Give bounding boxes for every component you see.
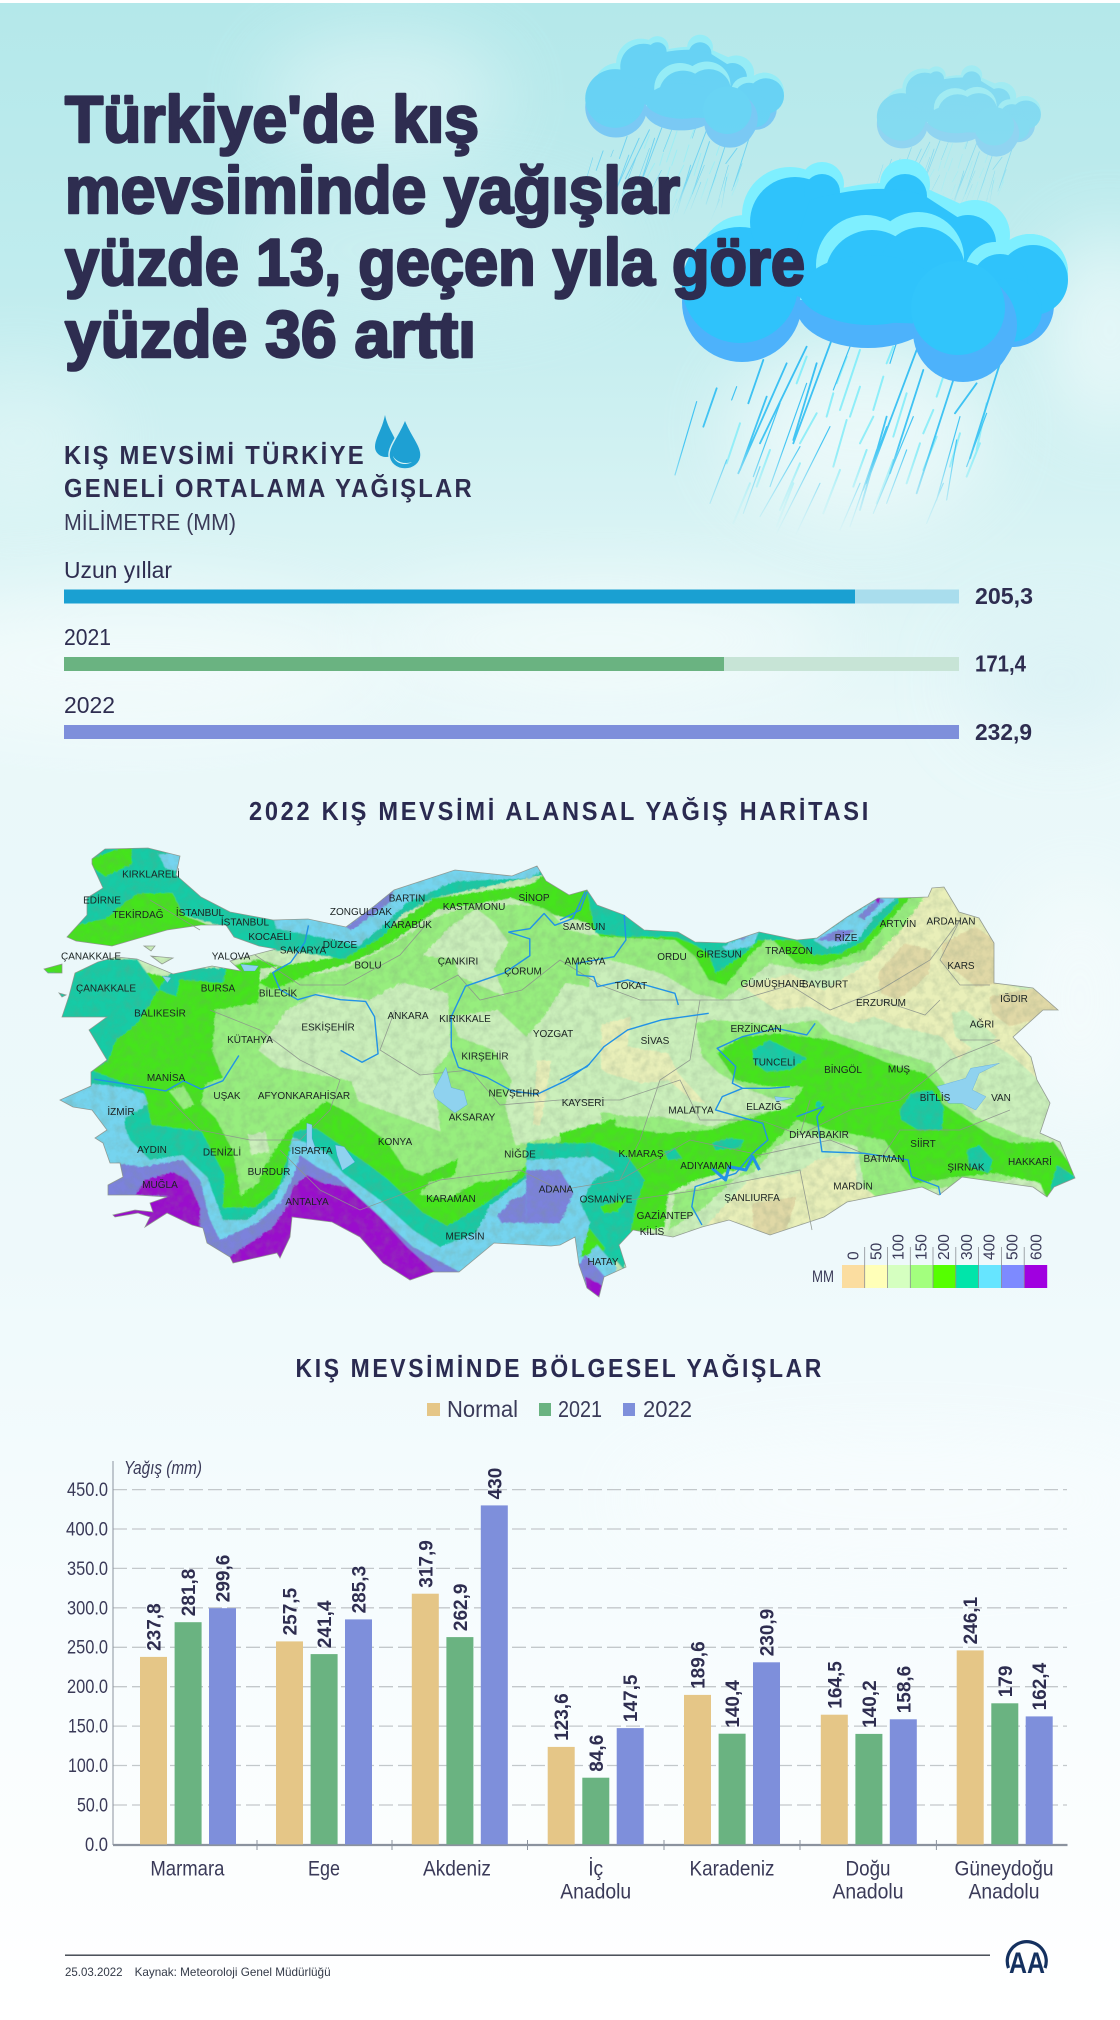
lime patch thrace bbox=[92, 848, 133, 878]
chart legend: 2021 bbox=[558, 1396, 602, 1422]
group: Güneydoğu Anadolu: Anadolu bbox=[968, 1881, 1040, 1904]
group: Doğu Anadolu: Anadolu bbox=[832, 1881, 904, 1904]
province labels bbox=[61, 868, 1052, 1268]
footer source line: 25.03.2022 bbox=[65, 1965, 123, 1979]
heading: regional rainfall: KIŞ MEVSİMİNDE BÖLGESEL YAĞIŞLAR bbox=[296, 1353, 824, 1383]
province labels: KAYSERİ bbox=[562, 1096, 604, 1109]
province labels: YALOVA bbox=[212, 952, 251, 962]
purple zones east bbox=[585, 897, 881, 1300]
light green zones east bbox=[560, 897, 1060, 1230]
province labels: BAYBURT bbox=[802, 980, 848, 991]
group: Akdeniz: 317,9 bbox=[416, 1540, 437, 1588]
group: Karadeniz: Karadeniz bbox=[690, 1858, 774, 1881]
province labels: BİTLİS bbox=[920, 1091, 951, 1104]
province labels: SİNOP bbox=[518, 891, 550, 904]
group: Marmara: 299,6 bbox=[214, 1555, 234, 1602]
province labels: KARAMAN bbox=[426, 1194, 476, 1205]
rivers bbox=[94, 892, 940, 1225]
y axis labels: 350.0 bbox=[67, 1558, 108, 1580]
province labels: TOKAT bbox=[615, 981, 647, 992]
group: Marmara: 237,8 bbox=[144, 1603, 166, 1651]
province labels: ÇANAKKALE bbox=[61, 952, 121, 962]
group: Akdeniz: 430 bbox=[485, 1468, 506, 1499]
province labels: K.MARAŞ bbox=[618, 1149, 664, 1160]
province labels: İSTANBUL bbox=[221, 916, 270, 928]
map legend bbox=[812, 1234, 1047, 1288]
heading: national average rainfall: KIŞ MEVSİMİ TÜRKİYE bbox=[64, 440, 366, 470]
chart legend bbox=[427, 1396, 692, 1422]
province labels: KASTAMONU bbox=[443, 902, 505, 913]
group: Güneydoğu Anadolu: 162,4 bbox=[1030, 1662, 1051, 1710]
province labels: BURSA bbox=[201, 984, 236, 994]
group: Akdeniz bbox=[412, 1468, 508, 1881]
group: Doğu Anadolu: Doğu bbox=[846, 1858, 890, 1881]
group: Ege: 257,5 bbox=[280, 1587, 302, 1635]
group: Marmara bbox=[140, 1555, 236, 1881]
province labels: AĞRI bbox=[970, 1018, 994, 1030]
bar: 2021 bbox=[64, 624, 1026, 676]
map legend: 100 bbox=[890, 1234, 908, 1260]
province labels: ISPARTA bbox=[291, 1146, 333, 1157]
province labels: SİİRT bbox=[910, 1137, 936, 1150]
periwinkle zone south bbox=[108, 1155, 460, 1272]
group: İç Anadolu: İç bbox=[588, 1858, 603, 1881]
province labels: DENİZLİ bbox=[203, 1146, 241, 1159]
title bbox=[65, 82, 805, 371]
yellow zones bbox=[600, 888, 1036, 1230]
heading: national average rainfall bbox=[64, 440, 474, 535]
group: Karadeniz bbox=[684, 1609, 780, 1881]
bar: 2022: 232,9 bbox=[975, 719, 1032, 745]
group: Güneydoğu Anadolu bbox=[954, 1596, 1054, 1904]
province labels: MARDİN bbox=[833, 1180, 873, 1192]
pale patches bbox=[248, 908, 601, 1155]
province labels: ERZURUM bbox=[856, 998, 906, 1009]
province labels: RİZE bbox=[835, 931, 858, 944]
province labels: OSMANİYE bbox=[580, 1192, 633, 1206]
group: İç Anadolu: 147,5 bbox=[621, 1674, 642, 1722]
province labels: KARS bbox=[947, 961, 975, 972]
province labels: ANTALYA bbox=[285, 1197, 329, 1208]
chart legend: 2022 bbox=[643, 1396, 692, 1422]
province labels: IĞDIR bbox=[1000, 992, 1028, 1005]
teal zones east bbox=[526, 873, 1077, 1270]
footer source line: Kaynak: Meteoroloji Genel Müdürlüğü bbox=[135, 1965, 331, 1979]
bar: Uzun yıllar bbox=[64, 557, 1033, 609]
lime zones west bbox=[44, 876, 617, 1228]
province labels: ÇORUM bbox=[504, 966, 542, 978]
group: Doğu Anadolu: 158,6 bbox=[894, 1666, 915, 1713]
title: yüzde 13, geçen yıla göre bbox=[65, 225, 805, 299]
map legend: MM bbox=[812, 1267, 834, 1286]
province labels: ADIYAMAN bbox=[680, 1161, 732, 1172]
group: Doğu Anadolu bbox=[821, 1661, 917, 1904]
group: Güneydoğu Anadolu: 179 bbox=[996, 1666, 1017, 1697]
map legend: 150 bbox=[914, 1234, 930, 1260]
small rain cloud left bbox=[582, 35, 784, 228]
province labels: UŞAK bbox=[213, 1091, 241, 1102]
group: Akdeniz: 262,9 bbox=[451, 1584, 472, 1631]
province labels: GİRESUN bbox=[696, 948, 742, 960]
province labels: KIRIKKALE bbox=[439, 1014, 491, 1025]
small rain cloud right bbox=[874, 65, 1041, 221]
province labels: ARTVİN bbox=[880, 917, 916, 930]
province labels: GAZİANTEP bbox=[637, 1209, 694, 1222]
province labels: AKSARAY bbox=[449, 1112, 496, 1124]
province labels: TRABZON bbox=[765, 946, 813, 957]
group: Ege: 241,4 bbox=[315, 1600, 336, 1648]
purple zones south bbox=[113, 1172, 435, 1280]
heading: map: 2022 KIŞ MEVSİMİ ALANSAL YAĞIŞ HARİTASI bbox=[249, 796, 871, 826]
periwinkle zones east bbox=[526, 898, 884, 1287]
group: İç Anadolu bbox=[548, 1674, 644, 1904]
group: İç Anadolu: 84,6 bbox=[587, 1735, 608, 1772]
group: Karadeniz: 230,9 bbox=[758, 1609, 778, 1656]
province labels: TEKİRDAĞ bbox=[112, 908, 164, 921]
y axis labels: 50.0 bbox=[77, 1794, 108, 1816]
map legend: 0 bbox=[846, 1251, 862, 1260]
y axis labels: 200.0 bbox=[67, 1676, 108, 1698]
province labels: DİYARBAKIR bbox=[789, 1128, 849, 1141]
icon: AA logo: AA bbox=[1009, 1947, 1045, 1980]
heading: national average rainfall: MİLİMETRE (MM) bbox=[64, 509, 236, 535]
heading: national average rainfall: GENELİ ORTALAMA YAĞIŞLAR bbox=[64, 473, 474, 503]
province labels: ZONGULDAK bbox=[330, 907, 392, 918]
big rain cloud bbox=[675, 159, 1068, 540]
province labels: MERSİN bbox=[446, 1230, 484, 1242]
map legend: 600 bbox=[1028, 1234, 1046, 1260]
province labels: BALIKESİR bbox=[134, 1007, 186, 1020]
province labels: ŞIRNAK bbox=[947, 1162, 985, 1174]
province labels: DÜZCE bbox=[323, 939, 358, 951]
province labels: KONYA bbox=[378, 1137, 412, 1148]
bar: Uzun yıllar: 205,3 bbox=[975, 583, 1033, 609]
group: İç Anadolu: Anadolu bbox=[560, 1881, 631, 1904]
y axis labels: 150.0 bbox=[68, 1716, 108, 1738]
province labels: ÇANAKKALE bbox=[76, 984, 136, 994]
province labels: BURDUR bbox=[248, 1167, 290, 1178]
map legend: 400 bbox=[982, 1234, 998, 1260]
group: Doğu Anadolu: 164,5 bbox=[825, 1661, 846, 1709]
group: Ege: 285,3 bbox=[350, 1566, 370, 1613]
province labels: ANKARA bbox=[387, 1011, 429, 1022]
province labels: EDİRNE bbox=[83, 894, 121, 906]
province labels: ESKİŞEHİR bbox=[301, 1021, 355, 1034]
rain streaks bbox=[675, 332, 1000, 540]
bar: Uzun yıllar: Uzun yıllar bbox=[64, 557, 172, 583]
province labels: BOLU bbox=[354, 960, 382, 972]
title: yüzde 36 arttı bbox=[65, 297, 476, 371]
province labels: ELAZIĞ bbox=[746, 1100, 782, 1113]
province labels: BATMAN bbox=[864, 1154, 904, 1165]
y axis labels: 400.0 bbox=[66, 1518, 108, 1540]
lakes bbox=[162, 964, 999, 1170]
province labels: HAKKARİ bbox=[1008, 1155, 1052, 1168]
sky zones north bbox=[159, 848, 541, 946]
map of Türkiye rainfall zones bbox=[43, 848, 1076, 1298]
province labels: MALATYA bbox=[668, 1106, 714, 1116]
province labels: AMASYA bbox=[565, 956, 606, 968]
province labels: VAN bbox=[991, 1093, 1011, 1104]
group: Doğu Anadolu: 140,2 bbox=[860, 1680, 881, 1728]
tan zones bbox=[753, 927, 1067, 1240]
group: İç Anadolu: 123,6 bbox=[552, 1693, 573, 1741]
group: Akdeniz: Akdeniz bbox=[423, 1858, 491, 1881]
sky zone south bbox=[60, 1082, 585, 1272]
sky zones east bbox=[526, 897, 898, 1290]
province labels: NEVŞEHİR bbox=[488, 1086, 540, 1100]
title: mevsiminde yağışlar bbox=[65, 153, 680, 227]
group: Marmara: 281,8 bbox=[179, 1569, 200, 1616]
group: Karadeniz: 140,4 bbox=[723, 1680, 744, 1728]
province labels: KARABÜK bbox=[384, 919, 432, 931]
province labels: KÜTAHYA bbox=[227, 1034, 273, 1046]
province labels: SİVAS bbox=[641, 1034, 670, 1047]
province labels: BİNGÖL bbox=[824, 1063, 862, 1076]
lime zones east bbox=[560, 890, 1077, 1257]
pale patch bbox=[952, 1010, 996, 1053]
province labels: BİLECİK bbox=[259, 987, 298, 1000]
province labels: ARDAHAN bbox=[927, 916, 975, 928]
group: Ege bbox=[276, 1566, 372, 1881]
y axis labels: 0.0 bbox=[85, 1834, 108, 1856]
y axis labels bbox=[66, 1479, 108, 1856]
province labels: TUNCELİ bbox=[753, 1056, 795, 1068]
icon: water drops bbox=[375, 415, 421, 469]
province labels: YOZGAT bbox=[533, 1029, 573, 1040]
province labels: GÜMÜŞHANE bbox=[740, 978, 806, 990]
province labels: ERZİNCAN bbox=[730, 1022, 782, 1035]
bar: 2021: 171,4 bbox=[975, 650, 1026, 676]
map legend: 50 bbox=[868, 1242, 886, 1260]
province labels: HATAY bbox=[587, 1257, 619, 1268]
province labels: KIRŞEHİR bbox=[461, 1050, 509, 1063]
chart legend: Normal bbox=[447, 1396, 518, 1422]
y axis labels: 250.0 bbox=[67, 1637, 108, 1659]
outline and province borders bbox=[44, 848, 1075, 1297]
province labels: AYDIN bbox=[137, 1145, 167, 1156]
province labels: ADANA bbox=[539, 1184, 574, 1196]
footer source line bbox=[65, 1954, 990, 1979]
province labels: ÇANKIRI bbox=[438, 956, 478, 968]
group: Güneydoğu Anadolu: Güneydoğu bbox=[954, 1858, 1054, 1881]
province labels: SAMSUN bbox=[563, 922, 605, 933]
province labels: MUŞ bbox=[888, 1064, 910, 1076]
map legend: 500 bbox=[1004, 1234, 1022, 1260]
axes bbox=[113, 1461, 1068, 1850]
group: Marmara: Marmara bbox=[150, 1858, 225, 1881]
province labels: BARTIN bbox=[389, 894, 425, 904]
province labels: İSTANBUL bbox=[176, 906, 225, 919]
axis title: Yağış (mm) bbox=[124, 1458, 202, 1478]
map legend: 300 bbox=[959, 1234, 976, 1260]
province labels: MUĞLA bbox=[142, 1178, 178, 1191]
province labels: ORDU bbox=[657, 952, 687, 963]
y axis labels: 100.0 bbox=[68, 1755, 108, 1777]
teal zones west bbox=[46, 848, 616, 1296]
bar chart: regional rainfall bbox=[66, 1458, 1068, 1904]
group: Karadeniz: 189,6 bbox=[688, 1641, 710, 1689]
province labels: İZMİR bbox=[107, 1105, 135, 1118]
map legend: 200 bbox=[936, 1234, 953, 1260]
province labels: AFYONKARAHİSAR bbox=[258, 1089, 350, 1102]
bar: 2022 bbox=[64, 692, 1032, 745]
province labels: MANİSA bbox=[147, 1071, 185, 1084]
province labels: NİĞDE bbox=[504, 1148, 536, 1161]
bar: 2022: 2022 bbox=[64, 692, 115, 718]
group: Ege: Ege bbox=[308, 1858, 340, 1881]
bar: 2021: 2021 bbox=[64, 624, 111, 650]
province labels: KİLİS bbox=[640, 1225, 665, 1238]
province labels: KIRKLARELİ bbox=[122, 868, 180, 880]
y axis labels: 300.0 bbox=[67, 1597, 108, 1619]
province labels: SAKARYA bbox=[280, 946, 326, 956]
province labels: KOCAELİ bbox=[248, 930, 292, 943]
title: Türkiye'de kış bbox=[65, 82, 479, 156]
y axis labels: 450.0 bbox=[67, 1479, 108, 1501]
group: Güneydoğu Anadolu: 246,1 bbox=[961, 1596, 982, 1644]
province labels: ŞANLIURFA bbox=[724, 1193, 780, 1204]
